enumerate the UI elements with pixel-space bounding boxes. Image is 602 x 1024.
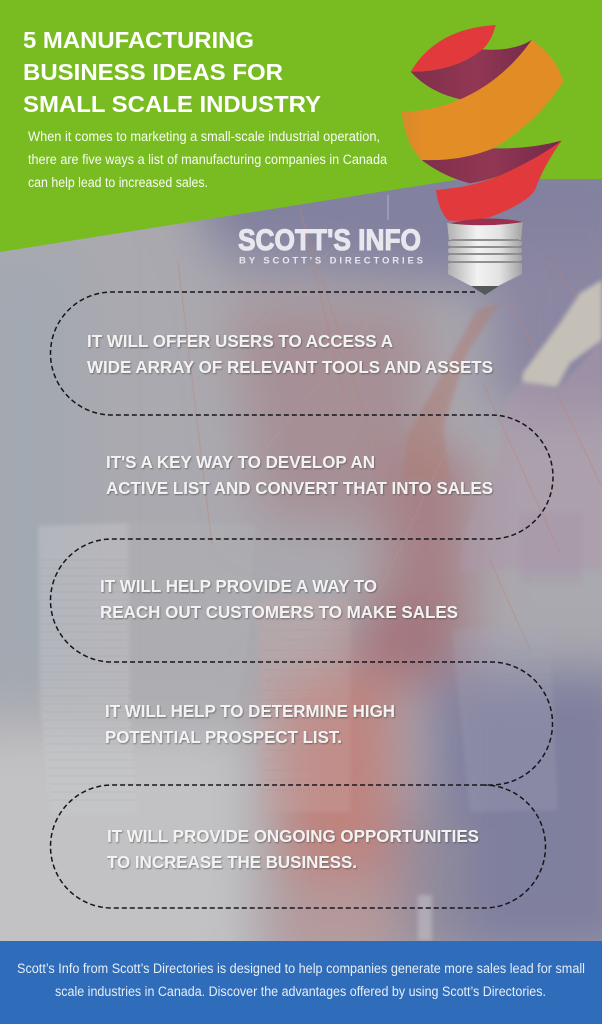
photo: streak highlights (387, 195, 432, 941)
photo: paper sheet (128, 522, 255, 720)
title: SMALL SCALE INDUSTRY (23, 91, 321, 117)
point 2: ACTIVE LIST AND CONVERT THAT INTO SALES (106, 478, 493, 498)
logo: BY SCOTT'S DIRECTORIES (239, 256, 423, 266)
point 4: POTENTIAL PROSPECT LIST. (105, 727, 342, 747)
dashed winding path (50, 292, 553, 908)
point 2 (106, 452, 493, 498)
green header panel (0, 0, 602, 252)
point 3: REACH OUT CUSTOMERS TO MAKE SALES (100, 602, 458, 622)
intro text: there are five ways a list of manufacturing companies in Canada (28, 152, 387, 167)
point 2: IT'S A KEY WAY TO DEVELOP AN (106, 452, 375, 472)
photo: forearm (460, 340, 602, 570)
point 1: WIDE ARRAY OF RELEVANT TOOLS AND ASSETS (87, 357, 493, 377)
point 5: IT WILL PROVIDE ONGOING OPPORTUNITIES (107, 826, 479, 846)
point 3: IT WILL HELP PROVIDE A WAY TO (100, 576, 377, 596)
point 3 (100, 576, 458, 622)
photo: coin stack middle (258, 596, 350, 812)
point 5: TO INCREASE THE BUSINESS. (107, 852, 357, 872)
point 4: IT WILL HELP TO DETERMINE HIGH (105, 701, 395, 721)
point 4 (105, 701, 395, 747)
point 1: IT WILL OFFER USERS TO ACCESS A (87, 331, 393, 351)
photo: square reflection (520, 513, 582, 583)
bulb orange band (402, 40, 563, 160)
footer text (17, 961, 585, 999)
intro text: can help lead to increased sales. (28, 175, 208, 190)
title: BUSINESS IDEAS FOR (23, 59, 283, 85)
intro text (28, 129, 387, 190)
title (23, 27, 321, 117)
bulb screw base (447, 218, 523, 295)
footer text: scale industries in Canada. Discover the advantages offered by using Scott’s Directories. (55, 984, 546, 999)
point 1 (87, 331, 493, 377)
photo: graph lines (178, 210, 602, 650)
icon: light bulb (402, 25, 563, 295)
photo: coin stack right (452, 626, 558, 812)
bulb lower maroon segment (422, 141, 562, 183)
title: 5 MANUFACTURING (23, 27, 254, 53)
photo: hand (522, 280, 602, 387)
bulb upper maroon segment (411, 40, 540, 100)
footer panel (0, 941, 602, 1024)
intro text: When it comes to marketing a small-scale industrial operation, (28, 129, 380, 144)
photo: sleeve swath (403, 303, 500, 480)
bulb lower red segment (436, 141, 562, 221)
bulb top red segment (411, 25, 496, 72)
point 5 (107, 826, 479, 872)
photo: coin stack left (38, 524, 130, 732)
logo: SCOTT'S INFO (238, 224, 421, 257)
background photo collage (0, 179, 602, 941)
